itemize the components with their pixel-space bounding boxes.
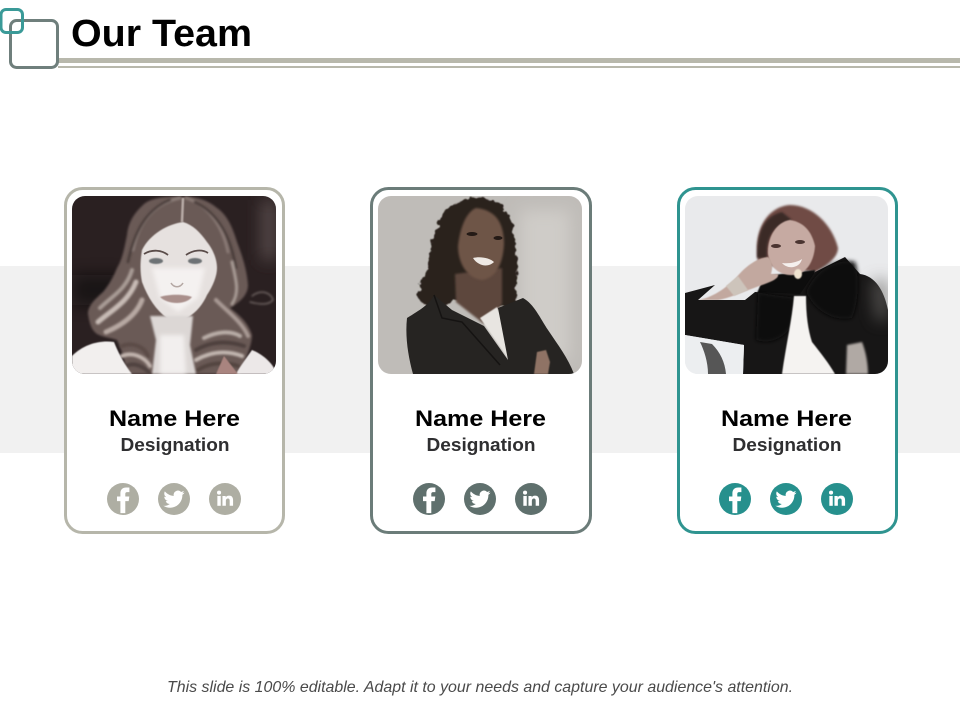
photo: woman with curly hair [72, 196, 276, 374]
icon: twitter 1 [158, 483, 190, 515]
name 2: Name Here [415, 406, 546, 431]
icon: linkedin 2 [515, 483, 547, 515]
name 3: Name Here [721, 406, 852, 431]
header rule [58, 58, 960, 68]
icon: twitter 2 [464, 483, 496, 515]
photo: woman in black blazer [378, 196, 582, 374]
card outline 3 [678, 188, 896, 532]
facial features [144, 251, 208, 303]
card outline 2 [372, 188, 590, 532]
background band [0, 266, 960, 453]
designation 2: Designation [426, 435, 536, 455]
icon: linkedin 3 [821, 483, 853, 515]
logo icon: overlapping squares [1, 10, 58, 68]
title: Our Team [71, 13, 252, 55]
designation 3: Designation [732, 435, 842, 455]
card outline 1 [66, 188, 284, 532]
icon: facebook 1 [107, 483, 139, 515]
icon: twitter 3 [770, 483, 802, 515]
footer note: This slide is 100% editable. Adapt it to your needs and capture your audience's attention. [167, 679, 793, 696]
designation 1: Designation [120, 435, 230, 455]
photo: woman in fur collar [685, 196, 888, 374]
icon: facebook 3 [719, 483, 751, 515]
icon: linkedin 1 [209, 483, 241, 515]
panel: team member 2 [372, 188, 590, 532]
name 1: Name Here [109, 406, 240, 431]
panel: team member 3 [678, 188, 896, 532]
icon: facebook 2 [413, 483, 445, 515]
panel: team member 1 [66, 188, 284, 532]
